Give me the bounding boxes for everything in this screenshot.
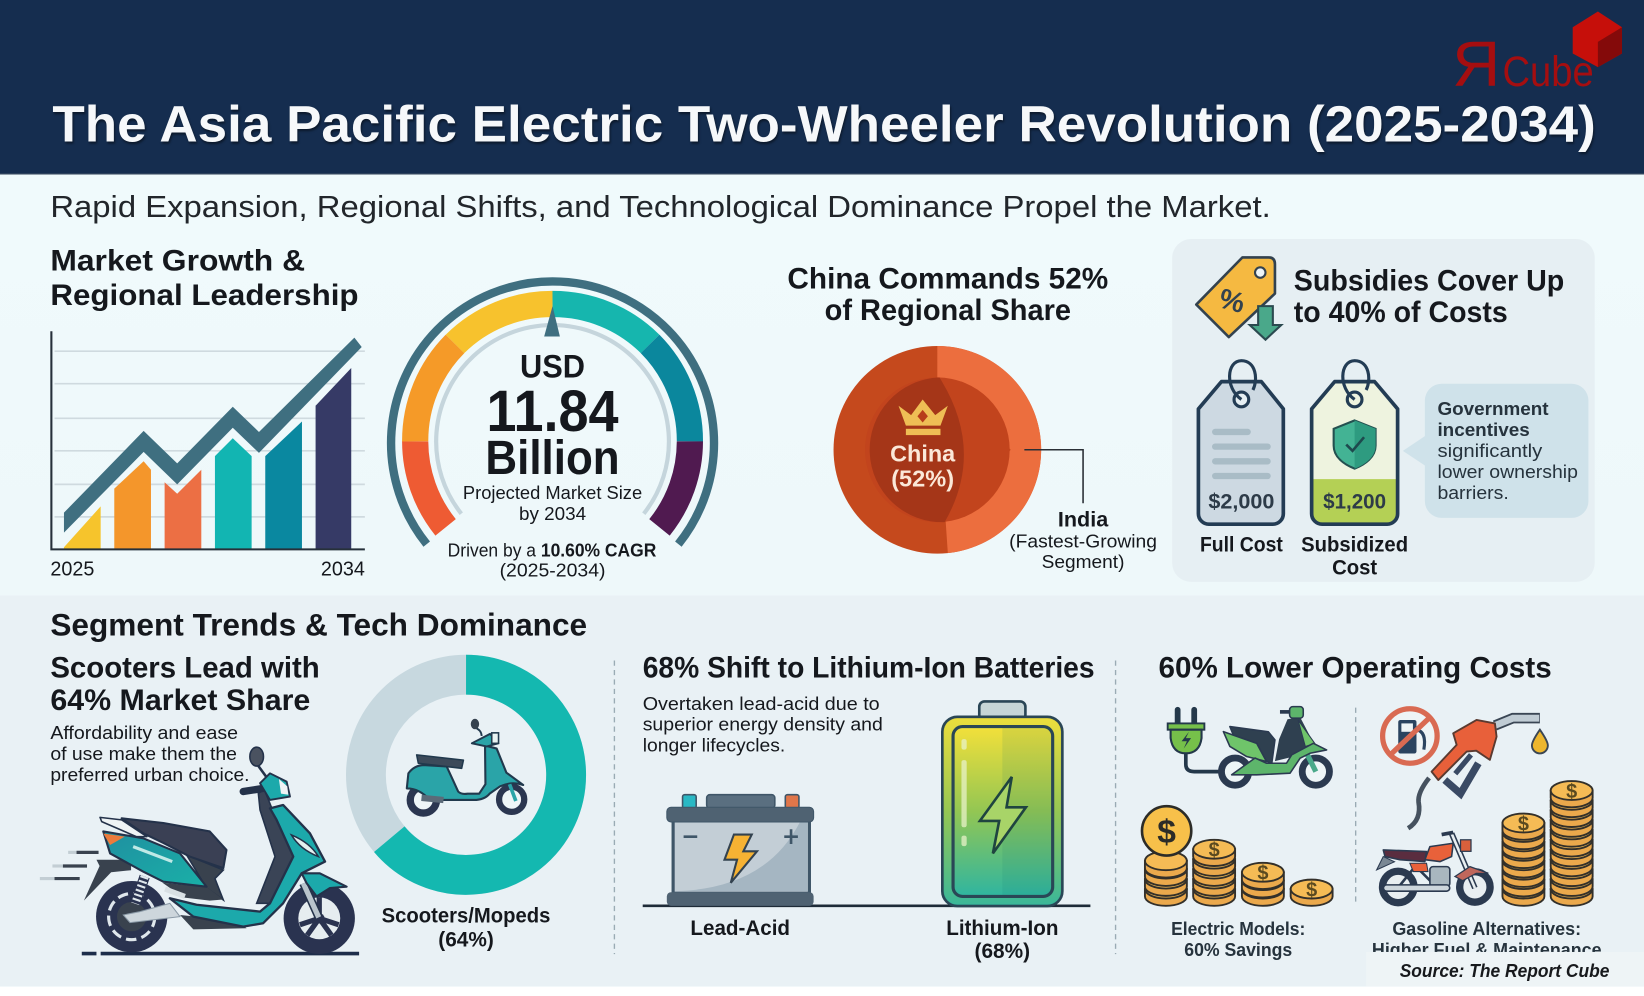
gauge: market size: 11.84 (486, 379, 619, 444)
icon: gasoline motorcycle (1377, 832, 1490, 903)
rear wheel (96, 881, 167, 952)
label: gasoline alternatives: Higher Fuel & Maintenance (1372, 939, 1602, 960)
heading: China share (787, 262, 1108, 327)
icon: green electric scooter (1221, 707, 1329, 785)
text: scooter description: Affordability and ease (50, 722, 238, 743)
heading: scooters lead: Scooters Lead with (50, 651, 320, 684)
coin stacks: electric savings: $ (1209, 840, 1220, 862)
icon: lead-acid battery (667, 795, 814, 906)
tail strip (100, 817, 147, 837)
label: lithium-ion: Lithium-Ion (946, 917, 1058, 940)
label: gasoline alternatives: Gasoline Alternatives: (1392, 918, 1581, 939)
callout: government incentives: lower ownership (1437, 461, 1578, 482)
logo: RCube (1452, 12, 1622, 100)
donut chart: regional share: (52%) (891, 465, 954, 491)
icon: discount tag: % (1216, 282, 1248, 319)
heading: subsidies (1294, 264, 1564, 329)
source note: Source: The Report Cube (1400, 960, 1609, 981)
price tag: subsidized cost (1301, 361, 1408, 580)
divider (613, 661, 615, 954)
gauge: market size: (2025-2034) (500, 560, 605, 581)
heading: China share: China Commands 52% (787, 262, 1108, 295)
heading: operating costs: 60% Lower Operating Costs (1159, 651, 1552, 684)
label: electric models: 60% Savings (1184, 939, 1292, 960)
label: gasoline alternatives (1372, 918, 1602, 960)
gauge: market size: Billion (485, 431, 620, 485)
rear body (103, 831, 207, 887)
callout: government incentives: barriers. (1437, 482, 1509, 503)
heading: market growth (50, 244, 359, 312)
donut chart: regional share (834, 346, 1157, 572)
icon: electric plug (1168, 710, 1219, 772)
coin stacks: gasoline costs (1502, 781, 1593, 906)
icon: fuel nozzle (1408, 718, 1548, 828)
callout: government incentives: significantly (1437, 440, 1543, 461)
coin stacks: electric savings: $ (1306, 879, 1317, 901)
text: scooter description: of use make them the (50, 743, 237, 764)
icon: no fuel sign (1383, 709, 1437, 763)
coin stacks: electric savings: $ (1157, 814, 1176, 851)
heading: lithium-ion shift: 68% Shift to Lithium-Ion Batteries (643, 651, 1095, 684)
gauge: market size: Projected Market Size (463, 482, 642, 503)
bar chart: market growth: 2025 (50, 559, 94, 581)
label: scooters/mopeds (382, 905, 550, 952)
price tag: subsidized cost: $1,200 (1323, 490, 1386, 513)
icon: shield (1334, 420, 1376, 469)
fork (303, 883, 319, 917)
label: electric models (1171, 918, 1305, 960)
price tag: subsidized cost: Cost (1332, 557, 1377, 580)
icon: crown (899, 399, 948, 435)
source note (1366, 952, 1644, 987)
text: battery description: Overtaken lead-acid due to (643, 693, 880, 714)
label: scooters/mopeds: Scooters/Mopeds (382, 905, 550, 928)
heading: segment trends: Segment Trends & Tech Dominance (50, 607, 587, 642)
bar chart: market growth (50, 331, 365, 581)
coin stacks: electric savings (1142, 806, 1333, 906)
text: battery description (643, 693, 883, 756)
coin stacks: electric savings: $ (1257, 863, 1268, 885)
bar chart: market growth: 2034 (321, 559, 365, 581)
coin stacks: gasoline costs: $ (1518, 813, 1529, 835)
divider (1355, 708, 1357, 904)
rear mudguard (84, 860, 131, 901)
label: lead-acid: Lead-Acid (690, 917, 790, 940)
callout: government incentives (1403, 384, 1588, 518)
label: scooters/mopeds: (64%) (438, 929, 494, 952)
gauge: market size (391, 281, 714, 581)
front wheel (284, 883, 355, 954)
heading: market growth: Market Growth & (50, 244, 305, 277)
heading: scooters lead: 64% Market Share (50, 684, 310, 717)
icon: small scooter (407, 719, 524, 813)
price tag: full cost (1198, 361, 1283, 556)
icon: lithium-ion battery (943, 701, 1062, 906)
gauge: market size: by 2034 (519, 503, 586, 524)
icon: fuel drop (1532, 730, 1548, 753)
logo: RCube: Cube (1502, 48, 1594, 96)
label: lithium-ion (946, 917, 1058, 963)
divider (1115, 661, 1117, 954)
donut chart: regional share: India (1058, 508, 1109, 531)
price tag: full cost: $2,000 (1208, 490, 1274, 513)
text: battery description: longer lifecycles. (643, 735, 785, 756)
price tag: full cost: Full Cost (1200, 533, 1283, 556)
callout: government incentives: Government (1437, 398, 1549, 419)
text: scooter description: preferred urban choice. (50, 764, 250, 785)
dark under frame (187, 855, 223, 900)
swingarm (123, 903, 180, 923)
text: scooter description (50, 722, 250, 785)
label: lithium-ion: (68%) (975, 940, 1030, 963)
panel: subsidies (1172, 239, 1595, 582)
heading: market growth: Regional Leadership (50, 279, 359, 312)
donut chart: regional share: China (890, 440, 955, 466)
illustration: large scooter (40, 747, 359, 954)
heading: China share: of Regional Share (825, 294, 1071, 327)
callout: government incentives: incentives (1437, 419, 1530, 440)
handlebar, mirror and headlight (243, 747, 290, 800)
ground line (643, 905, 1090, 907)
header band (0, 0, 1644, 175)
label: electric models: Electric Models: (1171, 918, 1305, 939)
title: The Asia Pacific Electric Two-Wheeler Revolution (2025-2034) (52, 95, 1596, 153)
subtitle: Rapid Expansion, Regional Shifts, and Technological Dominance Propel the Market. (50, 190, 1271, 224)
lower section background (0, 596, 1644, 987)
seat (122, 818, 226, 868)
donut chart: scooter share (366, 675, 566, 952)
dark leg panel (257, 789, 293, 903)
gauge: market size: USD (520, 348, 585, 384)
gauge: market size: Driven by a 10.60% CAGR (448, 540, 657, 561)
page background (0, 174, 1644, 596)
front fender (302, 873, 347, 896)
heading: subsidies: to 40% of Costs (1294, 296, 1508, 329)
heading: scooters lead (50, 651, 320, 717)
text: battery description: superior energy density and (643, 714, 883, 735)
rear shock (135, 876, 145, 904)
price tag: subsidized cost: Subsidized (1301, 533, 1408, 556)
heading: subsidies: Subsidies Cover Up (1294, 264, 1564, 297)
gauge needle (544, 306, 560, 337)
logo: RCube: Я (1452, 28, 1500, 100)
icon: discount tag (1196, 257, 1281, 340)
donut chart: regional share: (Fastest-Growing (1009, 530, 1157, 551)
donut chart: regional share: Segment) (1042, 551, 1124, 572)
coin stacks: gasoline costs: $ (1566, 781, 1577, 803)
floor and shield (170, 805, 325, 927)
